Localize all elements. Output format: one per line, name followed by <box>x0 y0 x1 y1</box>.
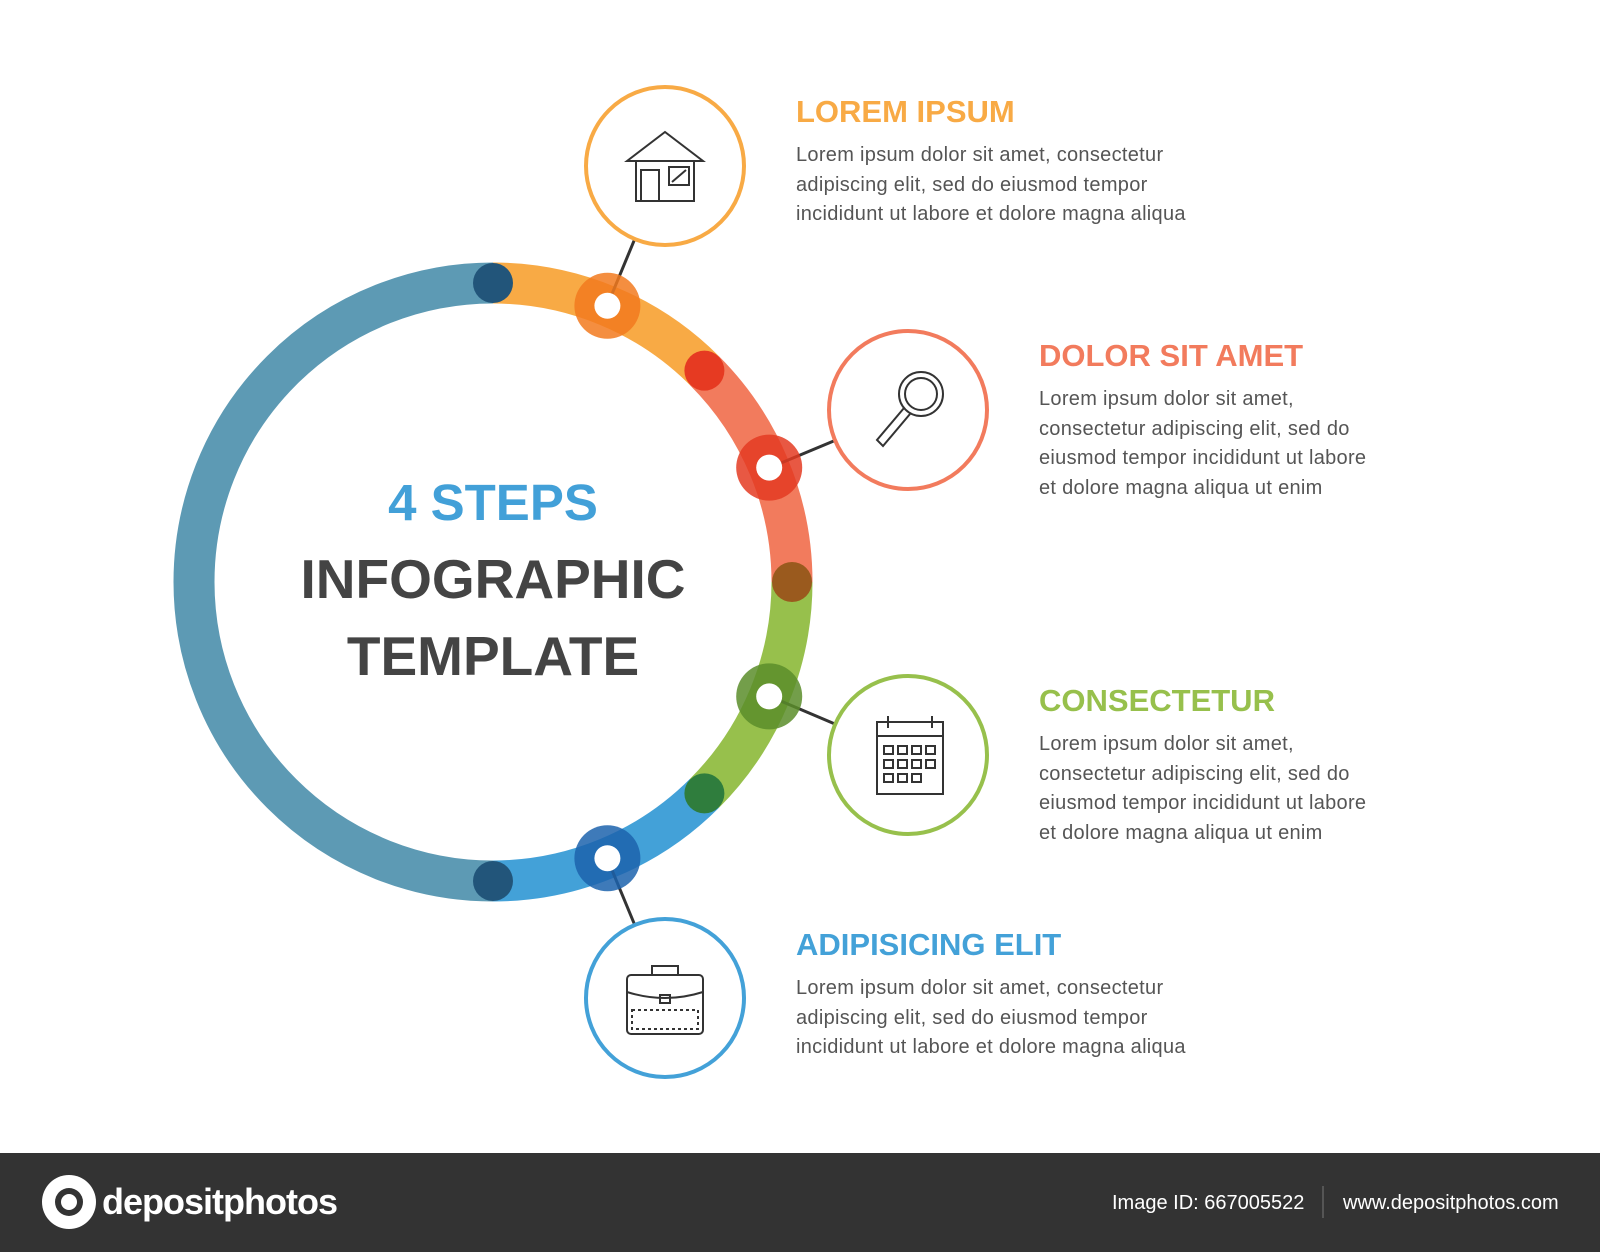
text block 2 <box>1039 338 1366 499</box>
footer bar: www.depositphotos.com <box>1342 1192 1559 1214</box>
text block 4: incididunt ut labore et dolore magna aliqua <box>796 1036 1186 1058</box>
icon: briefcase <box>586 919 744 1077</box>
ring chart <box>194 263 812 901</box>
text block 2: eiusmod tempor incididunt ut labore <box>1039 447 1366 469</box>
text block 4: ADIPISICING ELIT <box>796 927 1061 962</box>
icon: calendar <box>829 676 987 834</box>
text block 2: consectetur adipiscing elit, sed do <box>1039 418 1350 440</box>
text block 1: Lorem ipsum dolor sit amet, consectetur <box>796 144 1163 166</box>
footer bar: Image ID: 667005522 <box>1112 1192 1304 1214</box>
text block 1 <box>796 94 1186 225</box>
text block 3: consectetur adipiscing elit, sed do <box>1039 763 1350 785</box>
text block 1: adipiscing elit, sed do eiusmod tempor <box>796 174 1148 196</box>
center title: TEMPLATE <box>347 625 639 687</box>
text block 3: et dolore magna aliqua ut enim <box>1039 822 1323 844</box>
icon: magnifier <box>829 331 987 489</box>
icon: house <box>586 87 744 245</box>
node markers <box>574 273 802 891</box>
text block 3: CONSECTETUR <box>1039 683 1275 718</box>
text block 4: Lorem ipsum dolor sit amet, consectetur <box>796 977 1163 999</box>
footer bar <box>0 1153 1600 1252</box>
text block 4 <box>796 927 1186 1058</box>
text block 3: eiusmod tempor incididunt ut labore <box>1039 792 1366 814</box>
center title: 4 STEPS <box>388 474 598 531</box>
text block 1: incididunt ut labore et dolore magna aliqua <box>796 203 1186 225</box>
text block 3 <box>1039 683 1366 844</box>
center title: INFOGRAPHIC <box>300 548 686 610</box>
connectors <box>607 166 908 998</box>
center title <box>300 474 686 687</box>
footer bar: depositphotos <box>102 1181 337 1222</box>
text block 3: Lorem ipsum dolor sit amet, <box>1039 733 1294 755</box>
text block 2: et dolore magna aliqua ut enim <box>1039 477 1323 499</box>
text block 4: adipiscing elit, sed do eiusmod tempor <box>796 1007 1148 1029</box>
text block 2: DOLOR SIT AMET <box>1039 338 1303 373</box>
text block 2: Lorem ipsum dolor sit amet, <box>1039 388 1294 410</box>
text block 1: LOREM IPSUM <box>796 94 1015 129</box>
